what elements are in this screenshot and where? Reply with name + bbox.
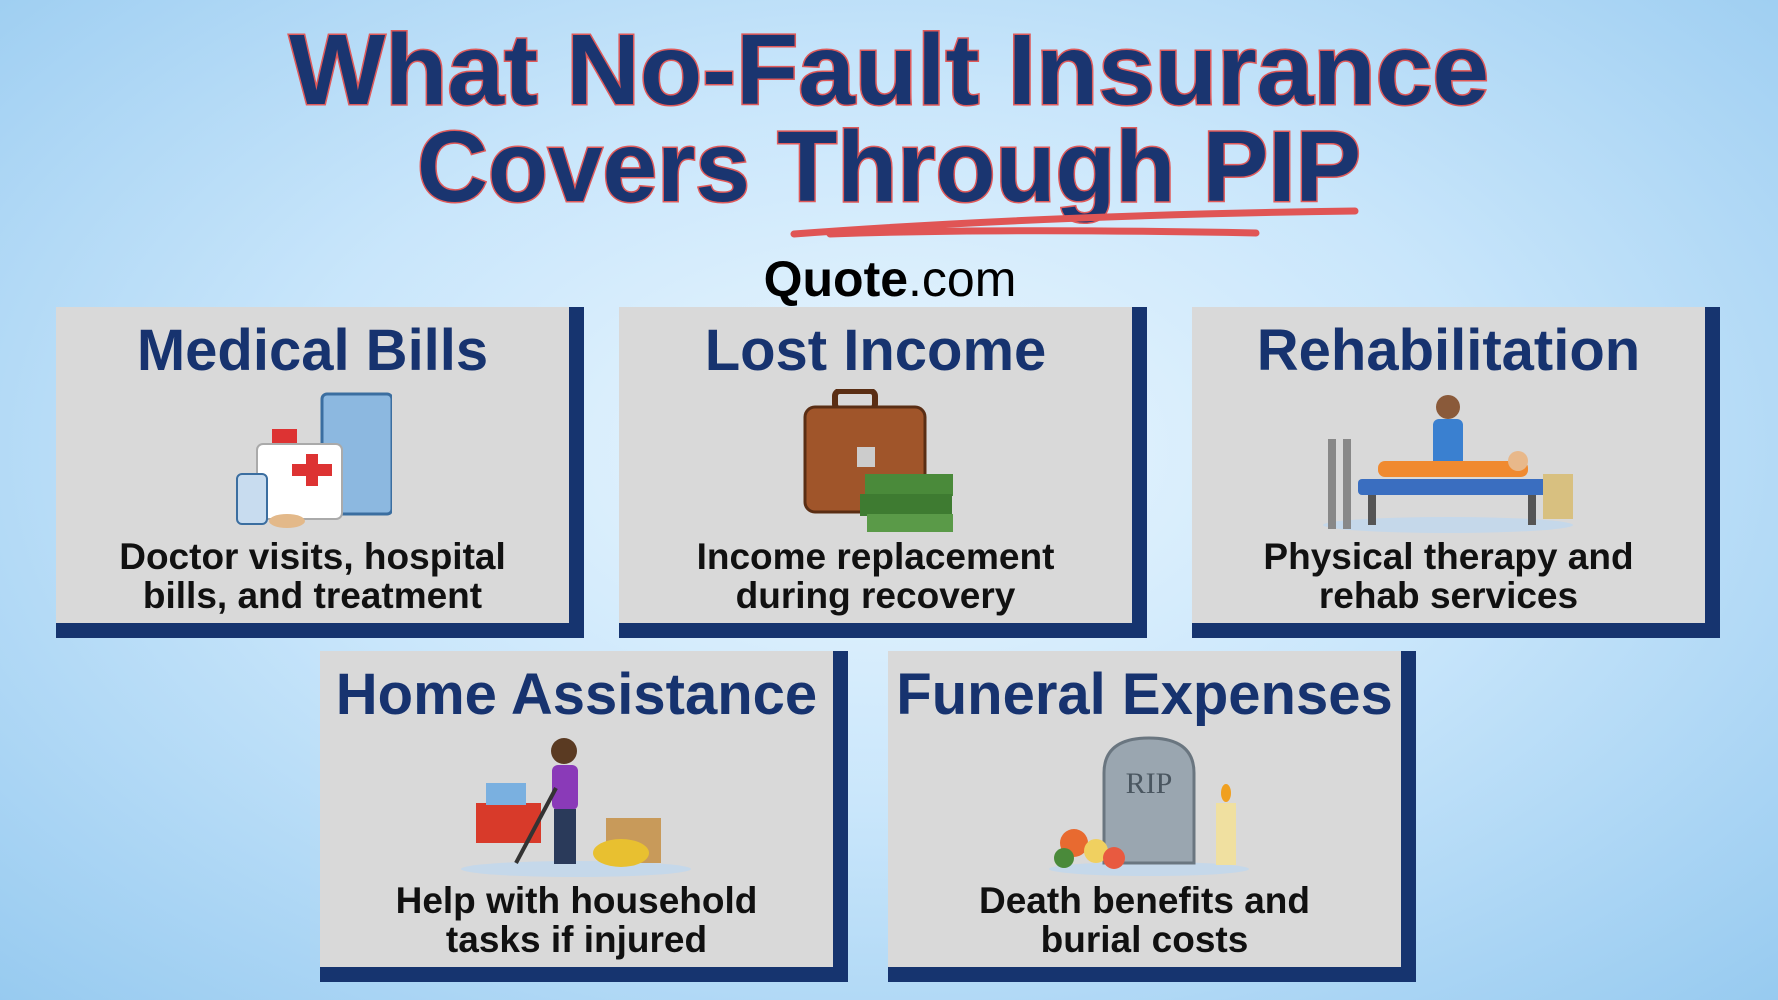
icon: medical kit [236,392,392,528]
panel: rehabilitation [1192,307,1720,638]
panel: lost income: Lost Income [705,318,1046,383]
panel: medical bills: Medical Bills [137,318,488,383]
panel: funeral expenses: Death benefits and [979,880,1310,921]
panel: home assistance: tasks if injured [446,919,707,960]
panel: rehabilitation: Rehabilitation [1257,318,1640,383]
icon: headstone: RIP [1126,767,1172,800]
panel: funeral expenses: Funeral Expenses [896,662,1393,727]
panel: rehabilitation: Physical therapy and [1263,536,1634,577]
title [287,14,1489,238]
icon: headstone [1049,736,1249,876]
panel: medical bills: Doctor visits, hospital [119,536,506,577]
panel: home assistance [320,651,848,982]
panel: home assistance: Help with household [396,880,757,921]
title: What No-Fault Insurance [289,14,1489,126]
icon: briefcase and money [804,389,953,532]
panel: funeral expenses: burial costs [1041,919,1248,960]
logo: Quote.com: Quote.com [764,251,1016,307]
panel: funeral expenses [888,651,1416,982]
icon: physical therapy [1323,395,1573,533]
panel: lost income: during recovery [736,575,1015,616]
panel: medical bills [56,307,584,638]
panel: medical bills: bills, and treatment [143,575,482,616]
icon: woman vacuuming [461,738,691,877]
panel: lost income [619,307,1147,638]
panel: home assistance: Home Assistance [336,662,817,727]
panel: lost income: Income replacement [697,536,1054,577]
title: Covers Through PIP [417,111,1361,223]
panel: rehabilitation: rehab services [1319,575,1578,616]
